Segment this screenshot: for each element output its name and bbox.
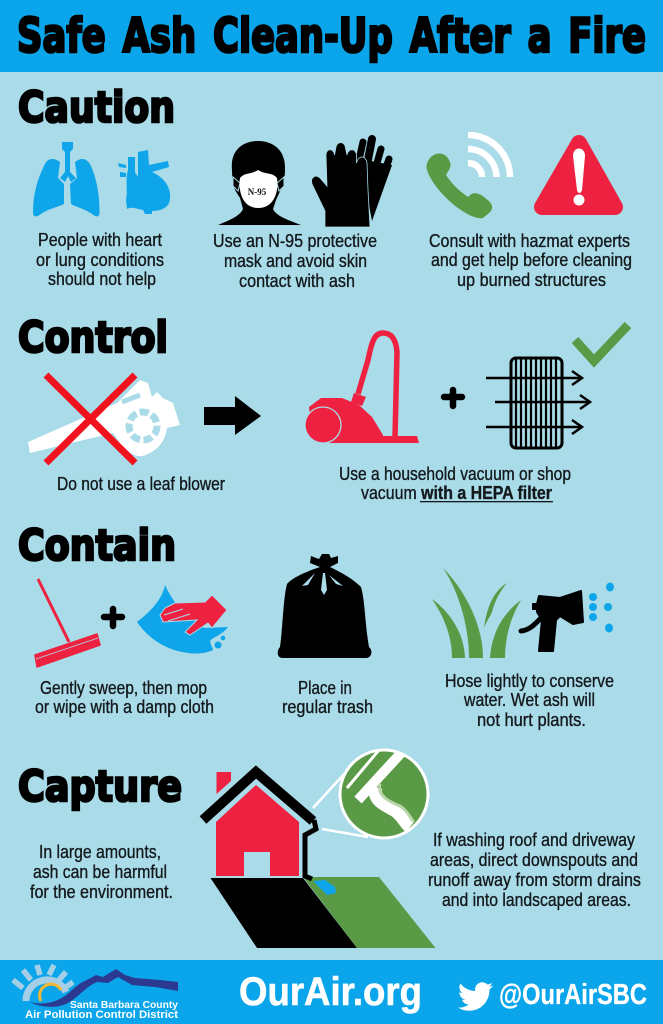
icon: leaf blower crossed out bbox=[28, 375, 180, 463]
caption: heart and lungs: should not help bbox=[48, 269, 156, 289]
caption: environment bbox=[30, 842, 173, 902]
icon: twitter bird bbox=[458, 982, 493, 1011]
icon: person with N-95 mask bbox=[218, 141, 301, 225]
caption: hose: water. Wet ash will bbox=[463, 690, 595, 710]
icon: trash bag bbox=[278, 554, 371, 658]
caption: heart and lungs: or lung conditions bbox=[36, 250, 164, 270]
caption: hazmat: and get help before cleaning bbox=[431, 250, 632, 270]
caption: downspouts: If washing roof and driveway bbox=[433, 830, 635, 850]
caption: vacuum: Use a household vacuum or shop bbox=[339, 464, 571, 484]
caption: vacuum: vacuum with a HEPA filter bbox=[361, 483, 552, 503]
caption: downspouts: runoff away from storm drains bbox=[428, 870, 641, 890]
caption: environment: for the environment. bbox=[30, 882, 173, 902]
icon: signal waves bbox=[468, 135, 510, 177]
icon: vacuum bbox=[305, 333, 419, 443]
caption: sweep: or wipe with a damp cloth bbox=[35, 697, 214, 717]
illustration: house and driveway bbox=[203, 772, 436, 948]
icon: lungs bbox=[33, 142, 100, 216]
caption: hazmat bbox=[429, 231, 632, 290]
caption: downspouts bbox=[428, 830, 641, 910]
caption: downspouts: areas, direct downspouts and bbox=[430, 850, 638, 870]
caption: trash: regular trash bbox=[282, 697, 373, 717]
footer band bbox=[0, 960, 663, 1024]
heading: Capture: Capture bbox=[18, 762, 182, 812]
caption: leaf blower: Do not use a leaf blower bbox=[57, 474, 225, 494]
caption: mask: Use an N-95 protective bbox=[213, 231, 377, 251]
icon: hand wiping with cloth bbox=[137, 585, 228, 654]
caption: environment: In large amounts, bbox=[39, 842, 161, 862]
icon: water drops bbox=[589, 582, 614, 632]
caption: sweep: Gently sweep, then mop bbox=[40, 678, 207, 698]
caption: heart and lungs bbox=[36, 230, 164, 289]
caption: downspouts: and into landscaped areas. bbox=[442, 890, 631, 910]
caption: vacuum bbox=[339, 464, 571, 503]
heading: Contain: Contain bbox=[18, 521, 176, 571]
logo text: Air Pollution Control District bbox=[25, 1009, 178, 1021]
logo bbox=[13, 965, 178, 1021]
icon: check mark bbox=[575, 325, 628, 361]
heading: Control: Control bbox=[18, 313, 168, 363]
caption: hazmat: up burned structures bbox=[457, 270, 606, 290]
caption: trash bbox=[282, 678, 373, 717]
caption: mask: contact with ash bbox=[239, 271, 355, 291]
icon: HEPA filter bbox=[486, 358, 590, 448]
logo text: Santa Barbara County bbox=[70, 1000, 178, 1011]
caption: hazmat: Consult with hazmat experts bbox=[429, 231, 630, 251]
caption: hose: not hurt plants. bbox=[477, 710, 586, 730]
caption: heart and lungs: People with heart bbox=[38, 230, 162, 250]
icon: grass bbox=[432, 568, 521, 658]
logo text bbox=[25, 1000, 178, 1021]
caption: environment: ash can be harmful bbox=[33, 862, 167, 882]
callout: gutter detail bbox=[313, 750, 428, 838]
caption: hose bbox=[445, 671, 614, 730]
plus bbox=[104, 609, 122, 626]
plus bbox=[444, 390, 462, 406]
caption: mask bbox=[213, 231, 377, 291]
icon: broom bbox=[35, 579, 100, 667]
arrow bbox=[204, 396, 261, 435]
website: OurAir.org bbox=[239, 970, 422, 1014]
caption: trash: Place in bbox=[298, 678, 352, 698]
heading: Caution: Caution bbox=[18, 83, 175, 133]
icon: hose nozzle bbox=[521, 591, 583, 651]
mask label: N-95 bbox=[248, 187, 267, 197]
caption: hose: Hose lightly to conserve bbox=[445, 671, 614, 691]
icon: warning triangle bbox=[542, 143, 615, 207]
icon: phone bbox=[427, 153, 492, 218]
caption: sweep bbox=[35, 678, 214, 717]
caption: mask: mask and avoid skin bbox=[224, 251, 367, 271]
icon: gloves bbox=[312, 139, 392, 227]
icon: heart bbox=[118, 150, 170, 214]
title banner bbox=[0, 0, 663, 72]
